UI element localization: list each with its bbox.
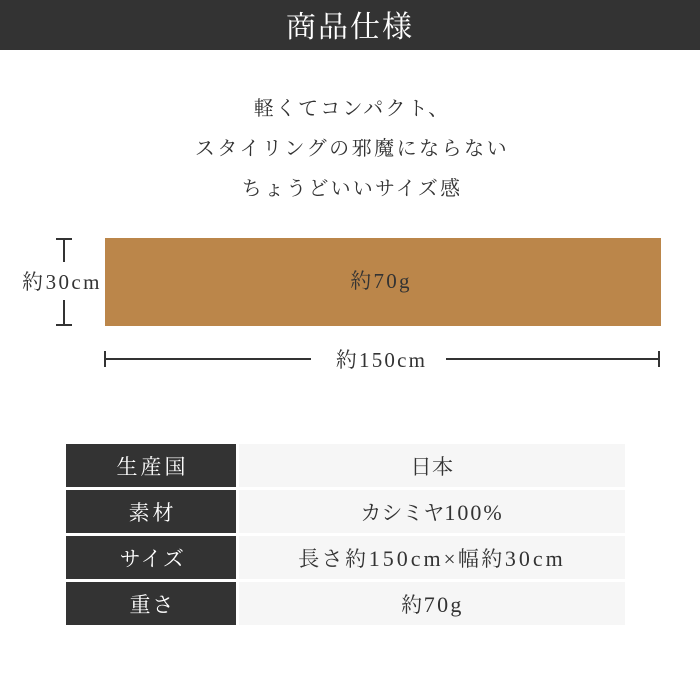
row value: material: カシミヤ100%: [360, 500, 504, 525]
row value: material: [239, 490, 625, 533]
row label: material: [66, 490, 236, 533]
spec table: [66, 444, 625, 625]
title banner: 商品仕様: [286, 11, 414, 44]
width arrow right: [446, 351, 660, 367]
width arrow left: [104, 351, 311, 367]
row label: material: 素材: [128, 501, 176, 525]
product size bar: 約70g: [350, 269, 412, 293]
intro line 1: 軽くてコンパクト、: [254, 98, 450, 120]
row label: size: サイズ: [120, 547, 185, 571]
row value: origin: 日本: [410, 455, 454, 479]
height label: 約30cm: [22, 270, 102, 294]
row value: weight: 約70g: [401, 592, 464, 617]
row label: weight: 重さ: [130, 593, 176, 617]
height arrow top: [56, 238, 72, 262]
row value: size: 長さ約150cm×幅約30cm: [298, 546, 566, 571]
height arrow bottom: [56, 300, 72, 326]
title banner: [0, 0, 700, 50]
intro line 2: スタイリングの邪魔にならない: [195, 138, 509, 160]
row value: weight: [239, 582, 625, 625]
intro text: [195, 98, 509, 200]
row label: origin: 生産国: [116, 455, 188, 479]
row value: size: [239, 536, 625, 579]
row label: origin: [66, 444, 236, 487]
row value: origin: [239, 444, 625, 487]
intro line 3: ちょうどいいサイズ感: [242, 178, 462, 200]
row label: size: [66, 536, 236, 579]
width label: 約150cm: [336, 348, 427, 372]
product size bar: [105, 238, 661, 326]
row label: weight: [66, 582, 236, 625]
